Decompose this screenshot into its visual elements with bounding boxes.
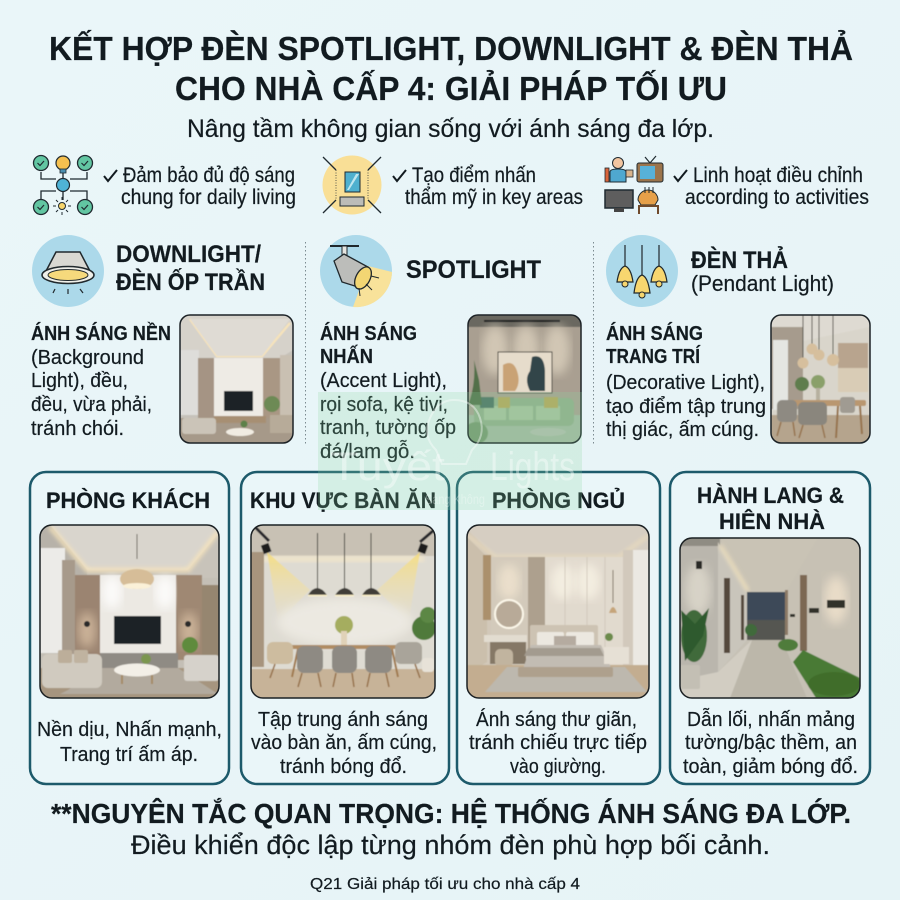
benefit text 1: [104, 164, 296, 209]
text: background light: ÁNH SÁNG NỀN: [31, 322, 171, 345]
key principle: Điều khiển độc lập từng nhóm đèn phù hợp bối cảnh.: [131, 830, 770, 860]
card: dining area: [241, 472, 449, 784]
heading: pendant: [691, 245, 834, 296]
panel: spotlight: [320, 235, 581, 463]
text: accent light: (Accent Light),: [320, 369, 447, 392]
heading: downlight: [116, 241, 265, 296]
caption: bedroom: vào giường.: [510, 755, 606, 778]
text: background light: [31, 322, 171, 440]
heading: spotlight: SPOTLIGHT: [406, 256, 541, 284]
text: decorative light: ÁNH SÁNG: [606, 322, 703, 345]
photo: hallway: [680, 538, 860, 698]
divider: [306, 242, 594, 445]
icon: accent wall frame: [322, 156, 382, 214]
text: decorative light: TRANG TRÍ: [606, 345, 700, 368]
benefit text 2: thẩm mỹ in key areas: [405, 186, 583, 209]
icon: pendant light: [606, 235, 678, 307]
text: decorative light: (Decorative Light),: [606, 371, 765, 394]
text: decorative light: thị giác, ấm cúng.: [606, 418, 759, 441]
subtitle: Nâng tầm không gian sống với ánh sáng đa lớp.: [187, 115, 714, 143]
panel: downlight: [31, 235, 293, 443]
caption: hallway: toàn, giảm bóng đổ.: [683, 755, 858, 778]
text: background light: Light), đều,: [31, 369, 128, 392]
caption: bedroom: Ánh sáng thư giãn,: [476, 708, 637, 731]
caption: living room: Trang trí ấm áp.: [60, 743, 198, 766]
caption: dining area: Tập trung ánh sáng: [258, 708, 428, 731]
card: bedroom: [457, 472, 660, 784]
photo: dining area: [251, 525, 436, 698]
heading: hallway and porch: [697, 483, 844, 534]
title: [49, 30, 853, 107]
key principle: [51, 797, 851, 860]
icon: spotlight: [320, 235, 392, 307]
watermark: Sáng Không: [425, 491, 485, 507]
benefit text 1: Đảm bảo đủ độ sáng: [123, 164, 295, 187]
benefit text 1: chung for daily living: [121, 186, 296, 209]
icon: downlight: [32, 235, 104, 307]
text: accent light: [320, 322, 456, 463]
heading: downlight: DOWNLIGHT/: [116, 241, 261, 268]
text: decorative light: tạo điểm tập trung: [606, 395, 766, 418]
photo: bedroom: [467, 525, 649, 698]
icon: activities: [605, 156, 663, 214]
title: KẾT HỢP ĐÈN SPOTLIGHT, DOWNLIGHT & ĐÈN THẢ: [49, 30, 853, 67]
caption: dining area: tránh bóng đổ.: [280, 755, 407, 778]
caption: living room: Nền dịu, Nhấn mạnh,: [37, 718, 222, 741]
photo: accent wall and sofa: [464, 315, 581, 444]
watermark: [318, 392, 582, 510]
text: background light: tránh chói.: [31, 417, 124, 440]
card: living room: [30, 472, 229, 784]
benefit text 2: Tạo điểm nhấn: [412, 164, 536, 187]
caption: dining area: vào bàn ăn, ấm cúng,: [251, 731, 437, 754]
caption: bedroom: [469, 708, 647, 778]
photo: living room: [40, 525, 219, 698]
card: hallway and porch: [670, 472, 870, 784]
watermark: Lights: [490, 445, 575, 489]
text: decorative light: [606, 322, 766, 441]
heading: bedroom: PHÒNG NGỦ: [492, 488, 625, 513]
caption: bedroom: tránh chiếu trực tiếp: [469, 731, 647, 754]
heading: hallway and porch: HÀNH LANG &: [697, 483, 844, 508]
photo: living room ambient: [180, 315, 293, 443]
icon: lighting network: [34, 156, 92, 215]
benefit text 3: Linh hoạt điều chỉnh: [693, 164, 863, 187]
heading: living room: PHÒNG KHÁCH: [46, 488, 210, 513]
photo: dining with pendants: [771, 315, 870, 443]
heading: downlight: ĐÈN ỐP TRẦN: [116, 268, 265, 296]
caption: hallway: [683, 708, 858, 778]
heading: pendant: ĐÈN THẢ: [691, 245, 788, 274]
text: accent light: NHẤN: [320, 345, 373, 368]
watermark: Tuyết: [330, 445, 445, 489]
footer note: Q21 Giải pháp tối ưu cho nhà cấp 4: [310, 876, 580, 893]
text: accent light: rọi sofa, kệ tivi,: [320, 393, 448, 416]
benefit text 3: according to activities: [685, 186, 869, 209]
panel: pendant: [606, 235, 870, 443]
heading: dining area: KHU VỰC BÀN ĂN: [250, 488, 436, 513]
heading: pendant: (Pendant Light): [691, 271, 834, 296]
benefit text 2: [393, 164, 583, 209]
caption: living room: [37, 718, 222, 766]
heading: hallway and porch: HIÊN NHÀ: [719, 509, 825, 534]
text: background light: (Background: [31, 346, 144, 369]
benefits row: [34, 156, 869, 215]
caption: hallway: Dẫn lối, nhấn mảng: [687, 708, 855, 731]
benefit text 3: [674, 164, 869, 209]
caption: hallway: tường/bậc thềm, an: [685, 731, 857, 754]
key principle: **NGUYÊN TẮC QUAN TRỌNG: HỆ THỐNG ÁNH SÁNG ĐA LỚP.: [51, 797, 851, 829]
title: CHO NHÀ CẤP 4: GIẢI PHÁP TỐI ƯU: [175, 69, 727, 107]
text: accent light: ÁNH SÁNG: [320, 322, 417, 345]
caption: dining area: [251, 708, 437, 778]
text: accent light: đá/lam gỗ.: [320, 440, 415, 463]
text: background light: đều, vừa phải,: [31, 393, 152, 416]
text: accent light: tranh, tường ốp: [320, 416, 456, 439]
